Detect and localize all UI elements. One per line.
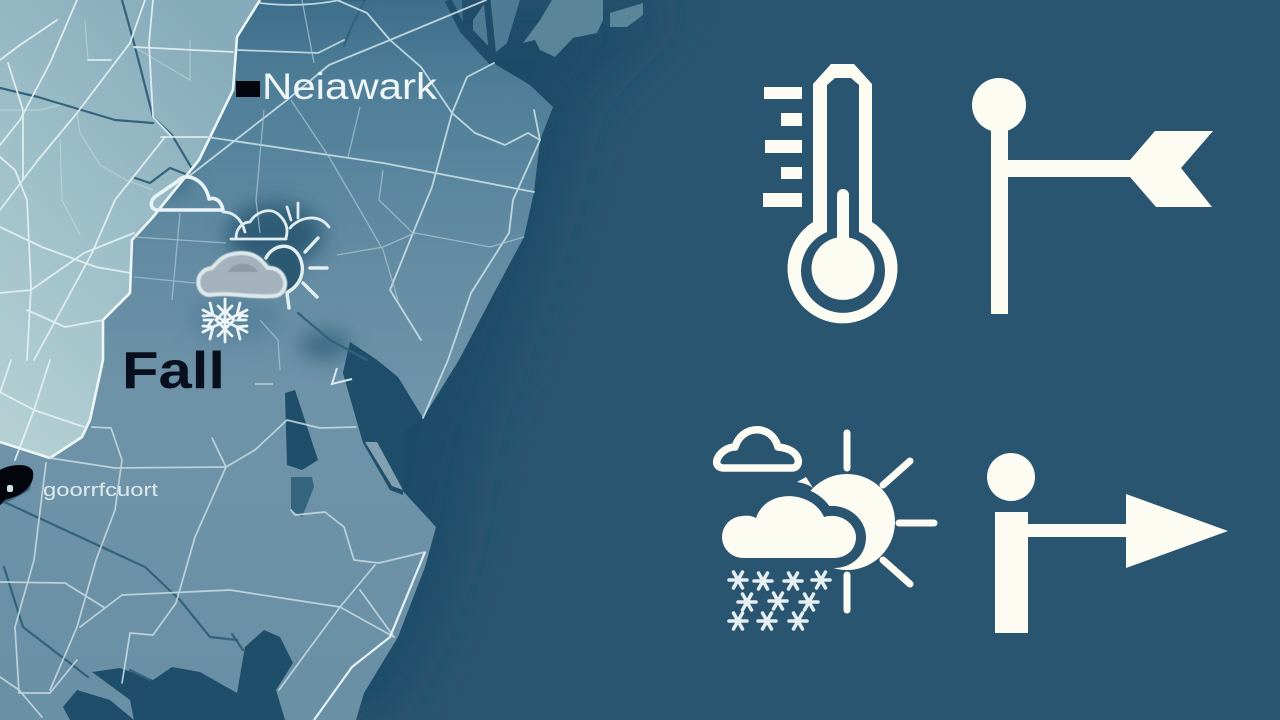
faint roads on upper land (134, 0, 524, 370)
gap around cloud (722, 496, 856, 558)
bright edge of light region (0, 0, 260, 458)
small sun fragment (797, 477, 813, 488)
coastal shadow (0, 0, 680, 720)
label: southern city: goorrfcuort (43, 480, 158, 500)
label: Neiawark: Neiawark (262, 66, 438, 107)
thermometer scale ticks (763, 87, 802, 207)
label: Fall: Fall (122, 342, 225, 400)
snowflakes (729, 572, 830, 629)
icon: thermometer (763, 64, 897, 323)
thermometer mercury (811, 189, 874, 300)
marker dot (7, 485, 13, 492)
map weather icon: outline cloud (151, 177, 223, 210)
map weather icon: second cloud (223, 203, 329, 239)
map (0, 0, 643, 720)
roads on lower land (0, 420, 425, 717)
map weather icon: sun (266, 238, 327, 308)
outline cloud (717, 430, 798, 468)
offshore islands (473, 0, 643, 57)
marker: Neiawark (236, 81, 260, 97)
land mass (0, 0, 553, 720)
sun disc (799, 474, 895, 570)
thermometer tube and bulb outline (788, 64, 897, 323)
roads on light region (0, 0, 233, 460)
sun rays (847, 433, 934, 610)
map weather icon: filled cloud (198, 253, 285, 296)
icon: wind direction arrow pointing right (987, 453, 1228, 633)
light sand bar (365, 442, 403, 490)
map weather icon: snowflake (203, 299, 247, 342)
icon: sun, clouds and snow (717, 430, 934, 629)
faint ghost mark (255, 383, 273, 385)
roads on upper land (188, 0, 540, 418)
northern inlet (448, 0, 493, 63)
icon: wind vane pointing left (972, 78, 1213, 314)
bright coastal road (314, 552, 425, 720)
marker: southern city (0, 465, 33, 505)
filled cloud (722, 496, 856, 558)
shading behind weather icons (130, 164, 351, 359)
river channels and water (0, 342, 423, 720)
small check mark (332, 368, 352, 384)
faint roads on light region (0, 20, 190, 235)
light inland region (0, 0, 260, 458)
dark rivers (0, 0, 367, 680)
